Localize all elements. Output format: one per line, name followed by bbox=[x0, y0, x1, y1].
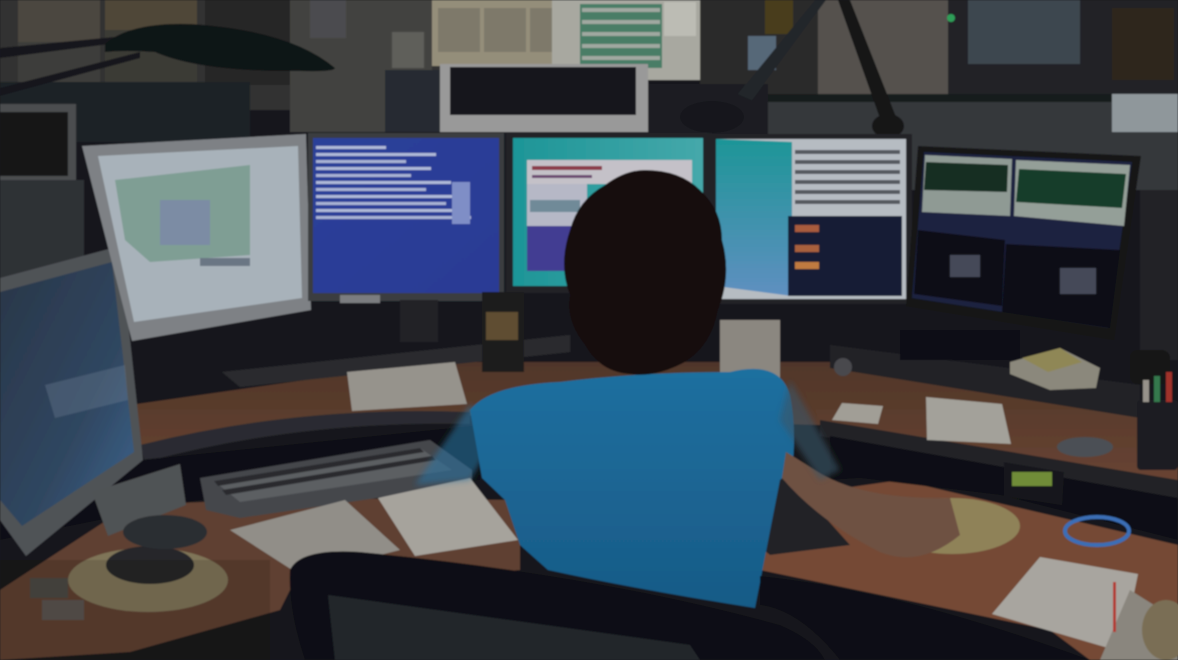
monitor 3: blue terminal bbox=[308, 133, 504, 303]
monitor 6: dark multi-panel display bbox=[906, 146, 1141, 340]
monitor support arm bbox=[680, 0, 904, 138]
papers on the upper desk bbox=[347, 362, 1011, 444]
keyboard bbox=[200, 440, 472, 518]
second keyboard right bbox=[752, 478, 850, 555]
dark gap under right desk bbox=[830, 436, 1178, 540]
under-desk shadow band bbox=[0, 425, 480, 540]
pen holder bbox=[1130, 350, 1178, 470]
books bbox=[1010, 348, 1100, 390]
wall mounted display bbox=[440, 64, 648, 132]
wall calendar bbox=[432, 0, 580, 66]
lower desk surface left bbox=[0, 498, 520, 660]
operator shirt bbox=[470, 369, 794, 608]
blue ring bbox=[1065, 517, 1129, 545]
operator hair bbox=[564, 170, 726, 375]
monitor 1: lower left bbox=[0, 246, 143, 556]
left side cabinet and small monitor bbox=[0, 104, 84, 290]
coaster bbox=[1057, 437, 1113, 457]
ghosted motion blur near right shoulder bbox=[780, 380, 840, 480]
status board bbox=[552, 0, 700, 80]
motion-blurred arm at left bbox=[415, 405, 500, 485]
docking unit bbox=[92, 464, 186, 536]
office chair back left bbox=[290, 551, 825, 660]
mouse pads and mice left bbox=[30, 515, 228, 620]
upper desk surface bbox=[130, 300, 1178, 498]
office chair back right bbox=[760, 576, 1090, 660]
cubicle partitions right bbox=[748, 36, 1178, 360]
operator arm bbox=[782, 452, 960, 557]
monitor 2: map display bbox=[82, 134, 311, 341]
papers under the operator bbox=[230, 478, 518, 575]
lower desk surface right bbox=[760, 480, 1178, 660]
monitor 5: teal and list display bbox=[712, 134, 912, 304]
dark vignette bbox=[0, 560, 270, 660]
desk phone unit bbox=[1004, 462, 1064, 505]
monitor stands and desk clutter bbox=[400, 292, 1020, 380]
papers lower right bbox=[992, 557, 1178, 660]
monitor 4: teal application bbox=[506, 133, 712, 293]
room back wall bbox=[0, 0, 1178, 142]
mouse pad right bbox=[884, 498, 1020, 554]
desk lamp left bbox=[0, 24, 335, 96]
